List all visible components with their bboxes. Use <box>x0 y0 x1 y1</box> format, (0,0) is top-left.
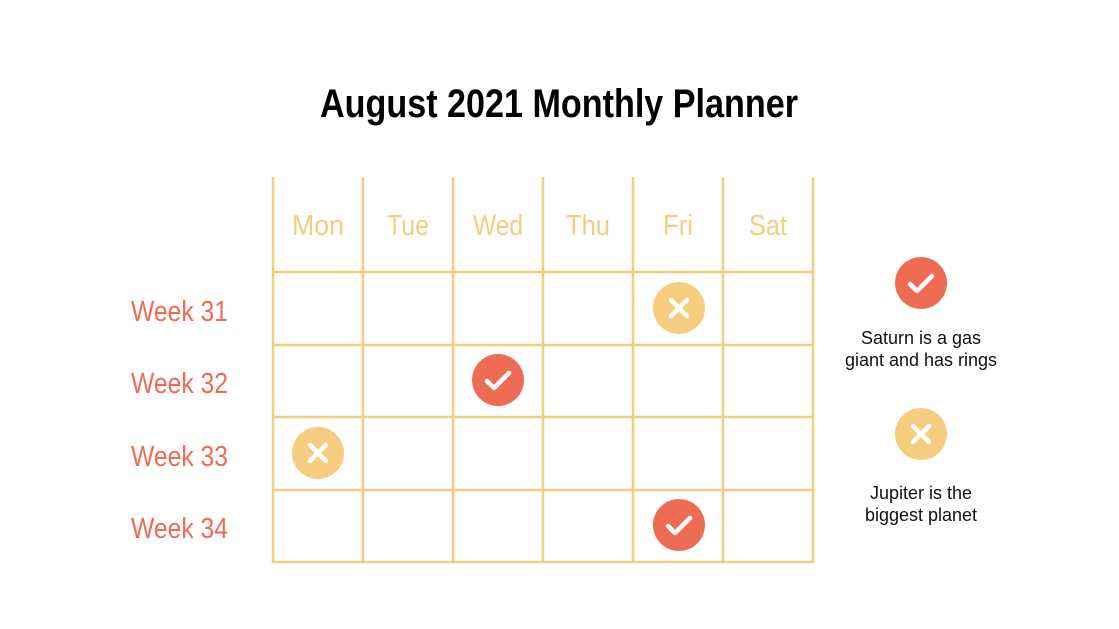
legend: x <box>865 408 977 525</box>
day headers: Tue <box>387 210 429 242</box>
day headers: Wed <box>473 210 523 242</box>
legend: x: Jupiter is the <box>870 483 972 503</box>
icon: check week32 wed <box>472 354 524 406</box>
week labels <box>131 296 228 545</box>
calendar grid <box>272 177 814 563</box>
title: August 2021 Monthly Planner <box>320 82 798 126</box>
day headers: Fri <box>663 210 693 242</box>
week labels: Week 34 <box>131 513 228 545</box>
legend: x: biggest planet <box>865 505 977 525</box>
legend: check <box>845 257 997 370</box>
day headers <box>292 210 787 242</box>
icon: x week31 fri <box>653 282 705 334</box>
legend: check: Saturn is a gas <box>861 328 981 348</box>
day headers: Thu <box>566 210 610 242</box>
legend: check: giant and has rings <box>845 350 997 370</box>
icon: x week33 mon <box>292 427 344 479</box>
icon: check week34 fri <box>653 499 705 551</box>
week labels: Week 32 <box>131 368 228 400</box>
day headers: Sat <box>749 210 787 242</box>
week labels: Week 31 <box>131 296 228 328</box>
week labels: Week 33 <box>131 441 228 473</box>
day headers: Mon <box>292 210 344 242</box>
